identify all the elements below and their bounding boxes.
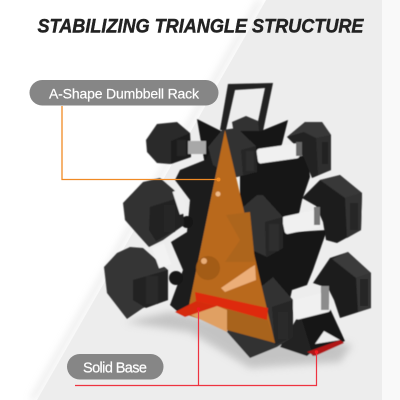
dumbbell: lower front — [227, 277, 293, 358]
rack frame — [169, 119, 345, 356]
red leader lines — [75, 307, 318, 386]
label: A-Shape Dumbbell Rack: A-Shape Dumbbell Rack — [49, 86, 200, 102]
dumbbell: centre top front — [208, 128, 257, 178]
dumbbell: centre middle front — [243, 195, 283, 257]
back centre dumbbell head — [232, 116, 260, 140]
orange leader line — [62, 106, 220, 182]
title: STABILIZING TRIANGLE STRUCTURE — [38, 16, 364, 38]
dumbbell: middle right — [302, 175, 362, 243]
orange triangle highlight — [187, 130, 275, 343]
dumbbell: top left — [146, 122, 191, 164]
chrome handles — [152, 141, 331, 320]
rack handle — [220, 83, 273, 136]
dumbbell: lower left — [104, 247, 168, 319]
dumbbell: middle left — [123, 178, 184, 247]
label: Solid Base — [67, 354, 164, 380]
dumbbell: lower right back — [313, 252, 371, 318]
red base highlights — [175, 292, 344, 356]
label: A-Shape Dumbbell Rack — [30, 80, 218, 106]
dumbbell rack illustration — [104, 83, 371, 368]
label: Solid Base: Solid Base — [83, 360, 147, 376]
dumbbell: top right — [287, 122, 331, 178]
